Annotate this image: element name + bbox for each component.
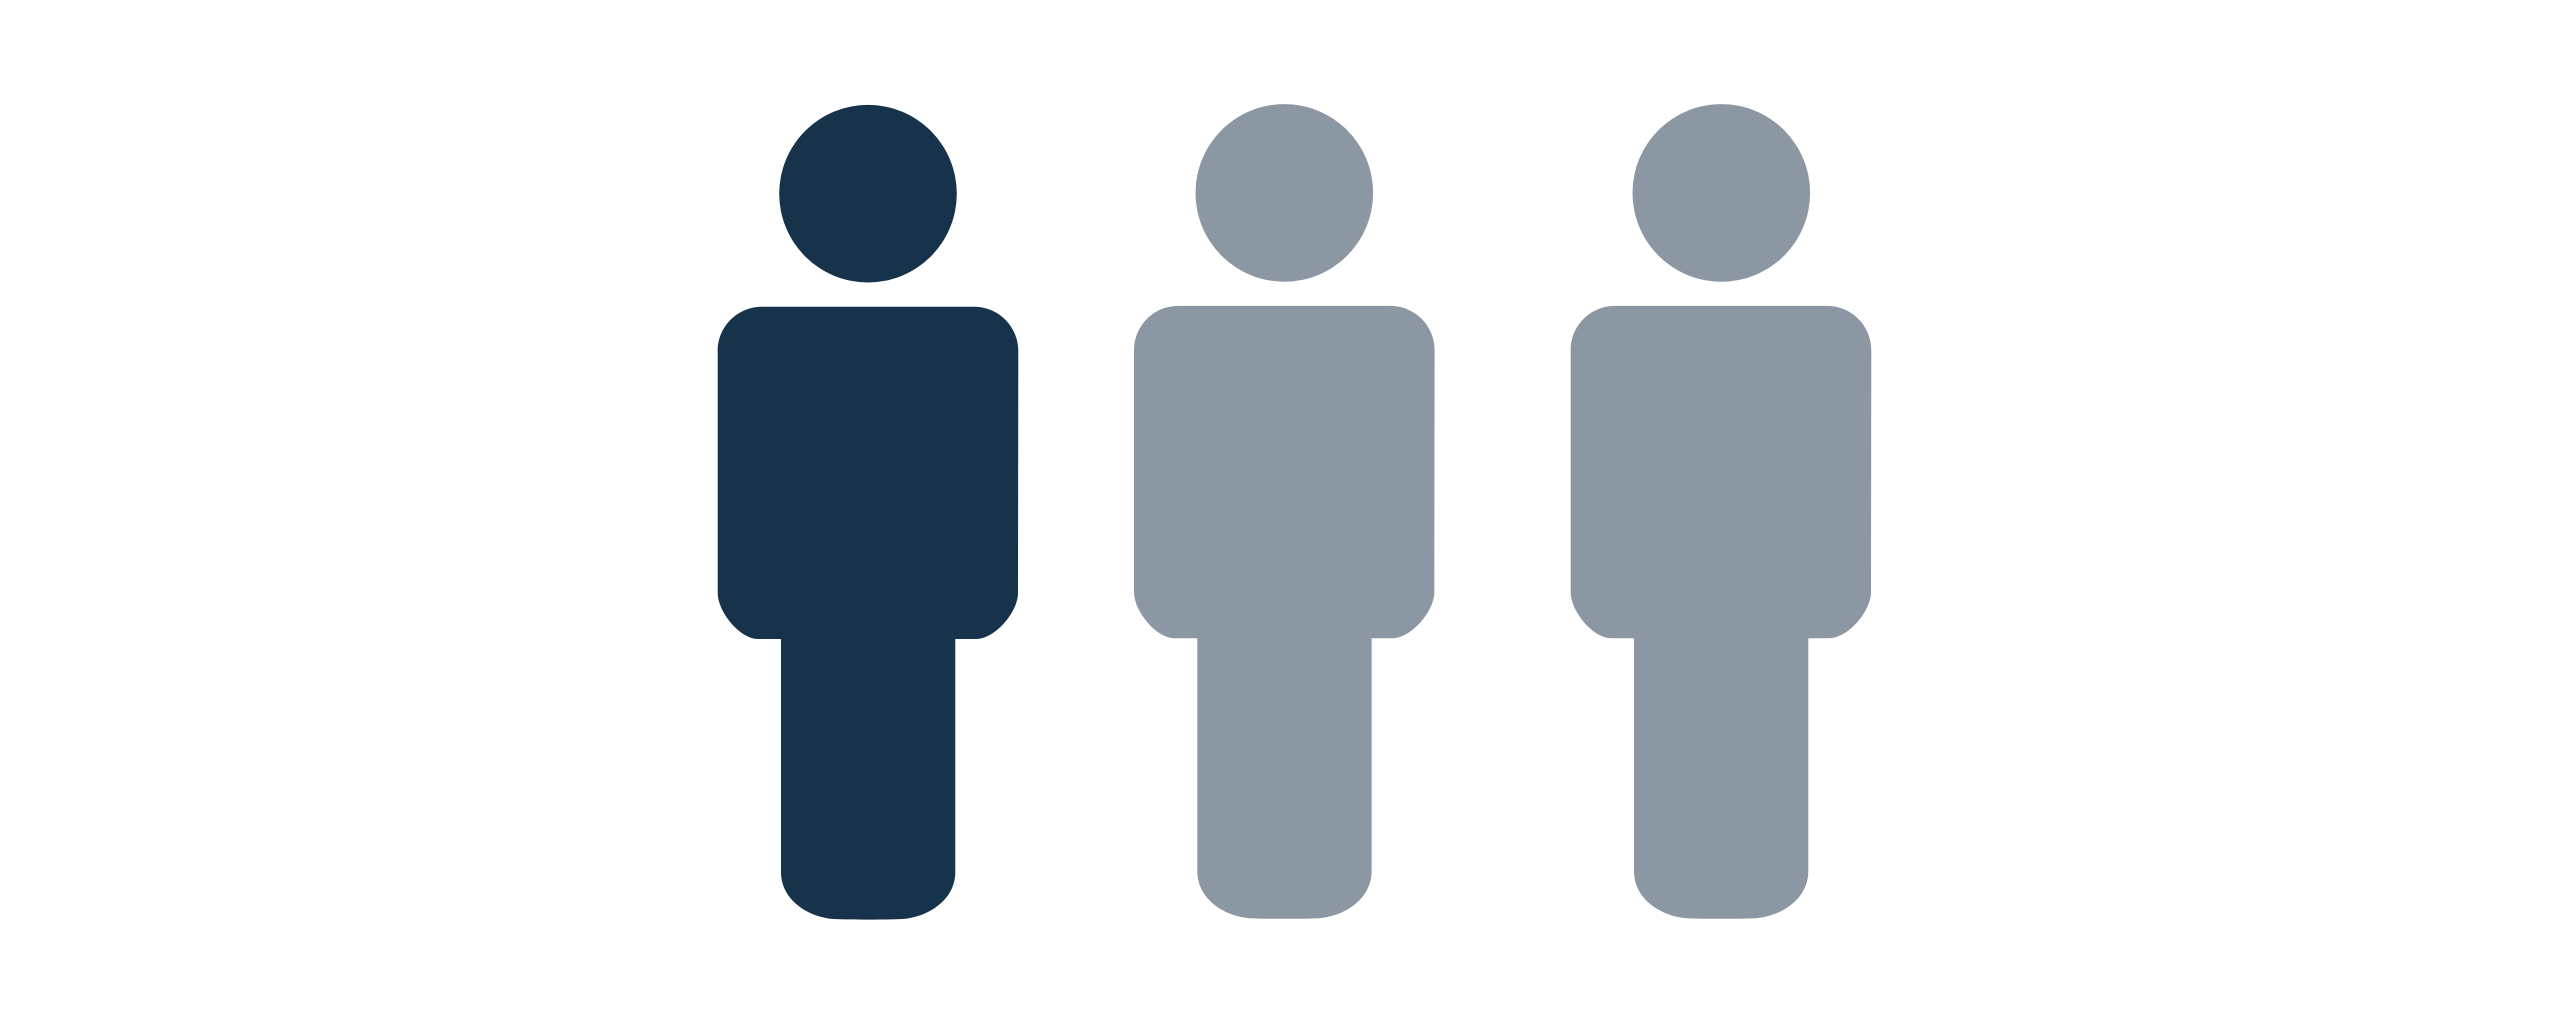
person 3: muted grey bbox=[1571, 104, 1871, 919]
person 3 head bbox=[1632, 104, 1810, 282]
person 1 head bbox=[779, 105, 957, 282]
person 2 head bbox=[1196, 104, 1373, 282]
person 2 body bbox=[1134, 306, 1435, 919]
person 3 body bbox=[1571, 306, 1871, 919]
person 1 body bbox=[718, 307, 1018, 920]
person 2: muted grey bbox=[1134, 104, 1435, 919]
person 1: highlighted dark navy bbox=[718, 105, 1018, 920]
